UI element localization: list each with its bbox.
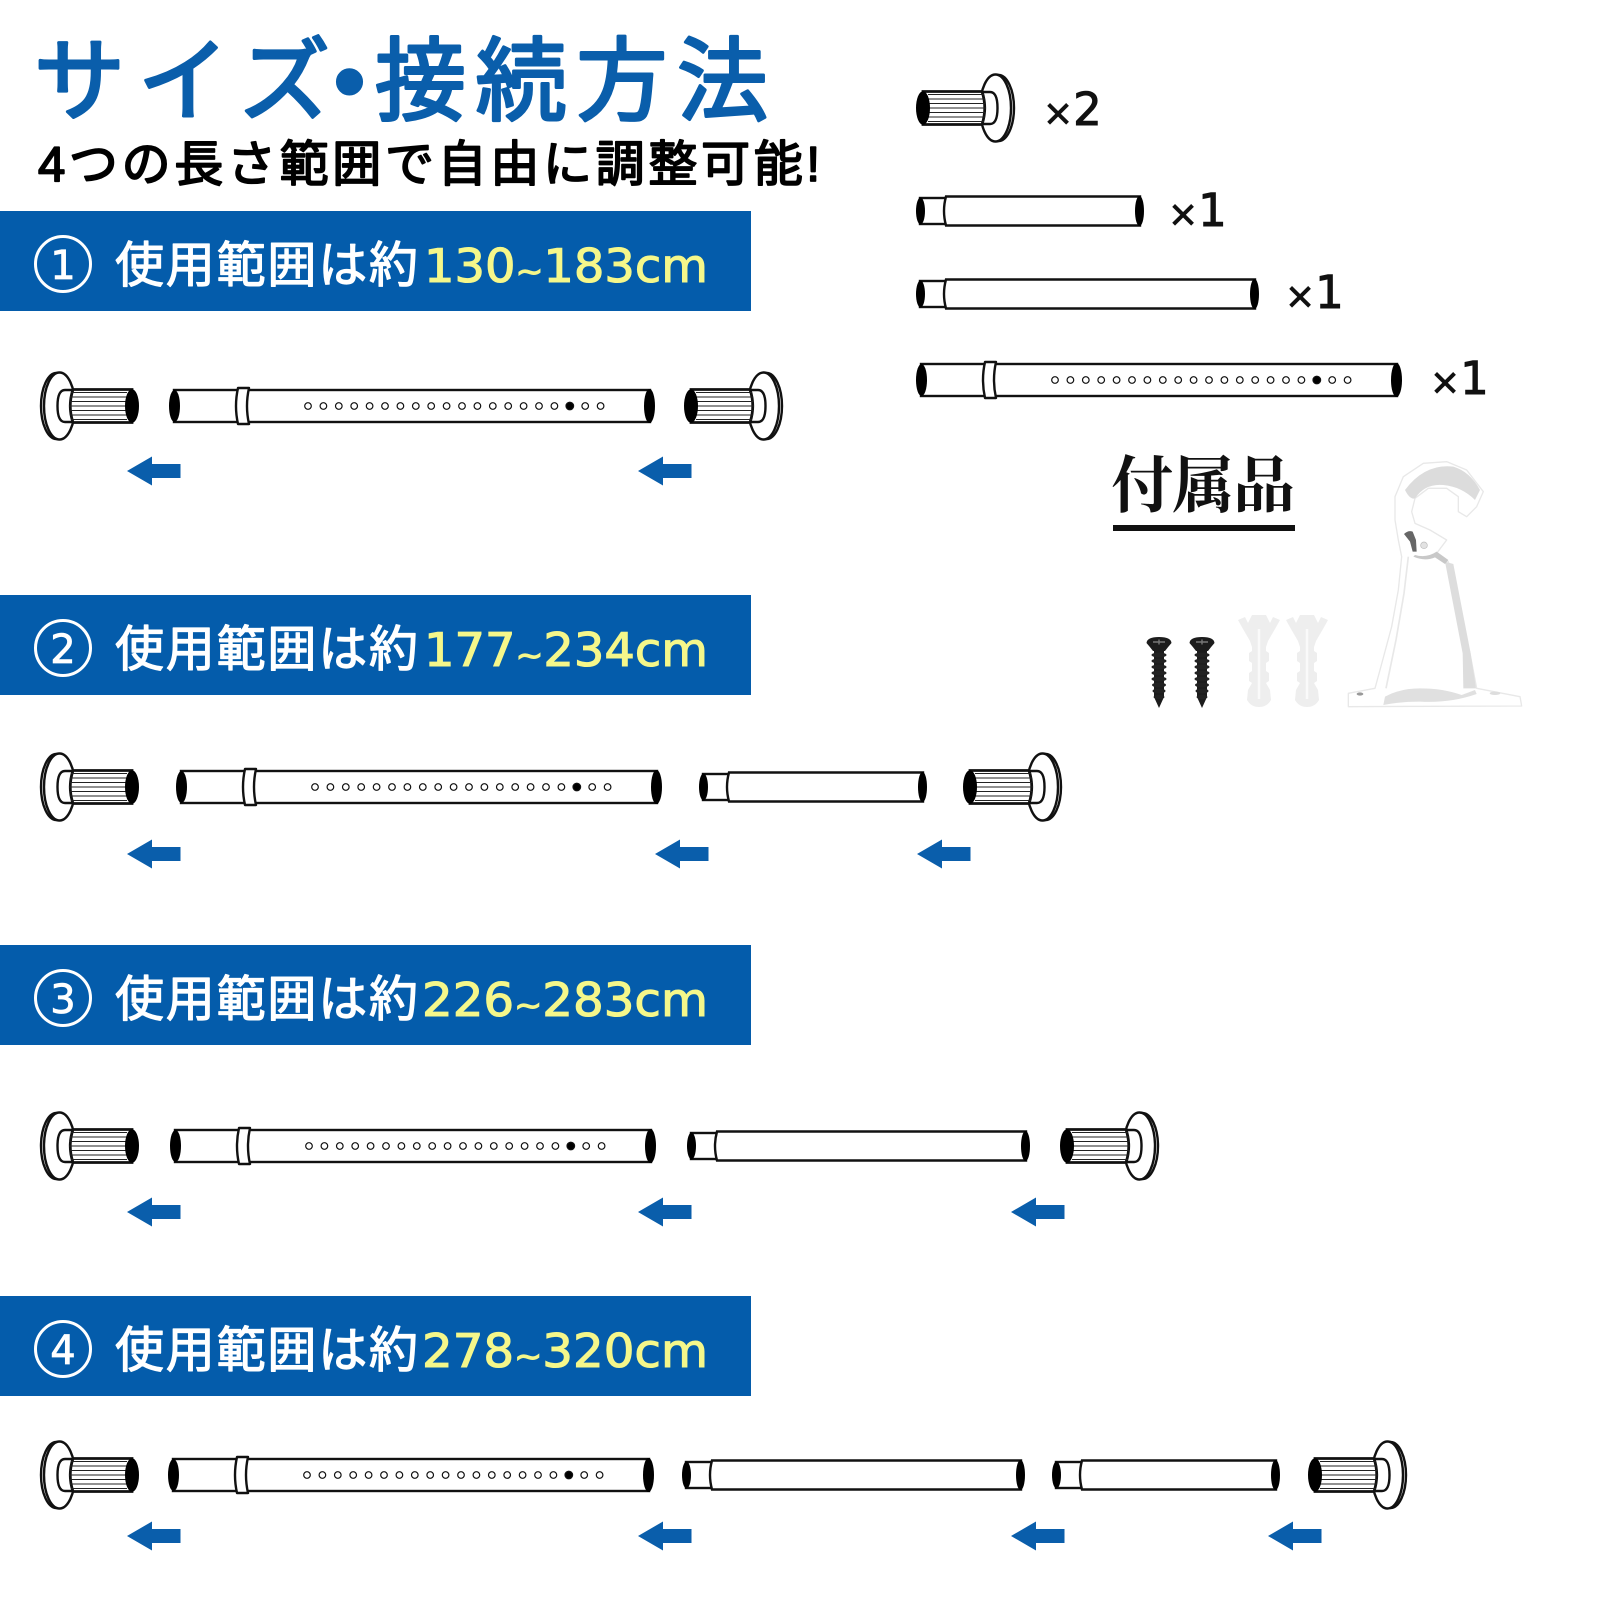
banner 1: 1: [50, 243, 76, 289]
banner 3: 使用範囲は約: [115, 973, 418, 1027]
icon: wall anchors: [1238, 615, 1328, 707]
banner 1: 130~183cm: [424, 239, 708, 293]
title: 接続方法: [375, 32, 768, 133]
banner 3: 3: [50, 977, 76, 1023]
banner 3: [0, 945, 751, 1045]
parts list: ×1: [1285, 266, 1344, 319]
banner 1: [0, 211, 751, 311]
subtitle: 4つの長さ範囲で自由に調整可能!: [38, 138, 820, 192]
parts list: ×2: [1043, 83, 1102, 136]
accessories heading: 付属品: [1111, 453, 1295, 521]
banner 4: 4: [50, 1328, 76, 1374]
row 1 assembly: [41, 372, 782, 486]
icon: curtain rod bracket: [1348, 462, 1522, 707]
row 2 assembly: [41, 754, 1061, 868]
title: •: [332, 25, 367, 137]
parts list: [916, 74, 1489, 405]
icon: screws: [1146, 637, 1214, 708]
banner 2: 使用範囲は約: [115, 623, 418, 677]
banner 3: 226~283cm: [422, 973, 708, 1027]
parts list: ×1: [1168, 184, 1227, 237]
banner 2: 2: [50, 627, 76, 673]
row 4 assembly: [41, 1442, 1406, 1550]
banner 1: 使用範囲は約: [115, 239, 418, 293]
banner 4: 使用範囲は約: [115, 1324, 418, 1378]
banner 2: 177~234cm: [424, 623, 708, 677]
banner 4: [0, 1296, 751, 1396]
banner 2: [0, 595, 751, 695]
row 3 assembly: [41, 1112, 1158, 1226]
banner 4: 278~320cm: [422, 1324, 708, 1378]
title: サイズ: [34, 32, 330, 133]
parts list: ×1: [1430, 352, 1489, 405]
title: [34, 25, 768, 137]
